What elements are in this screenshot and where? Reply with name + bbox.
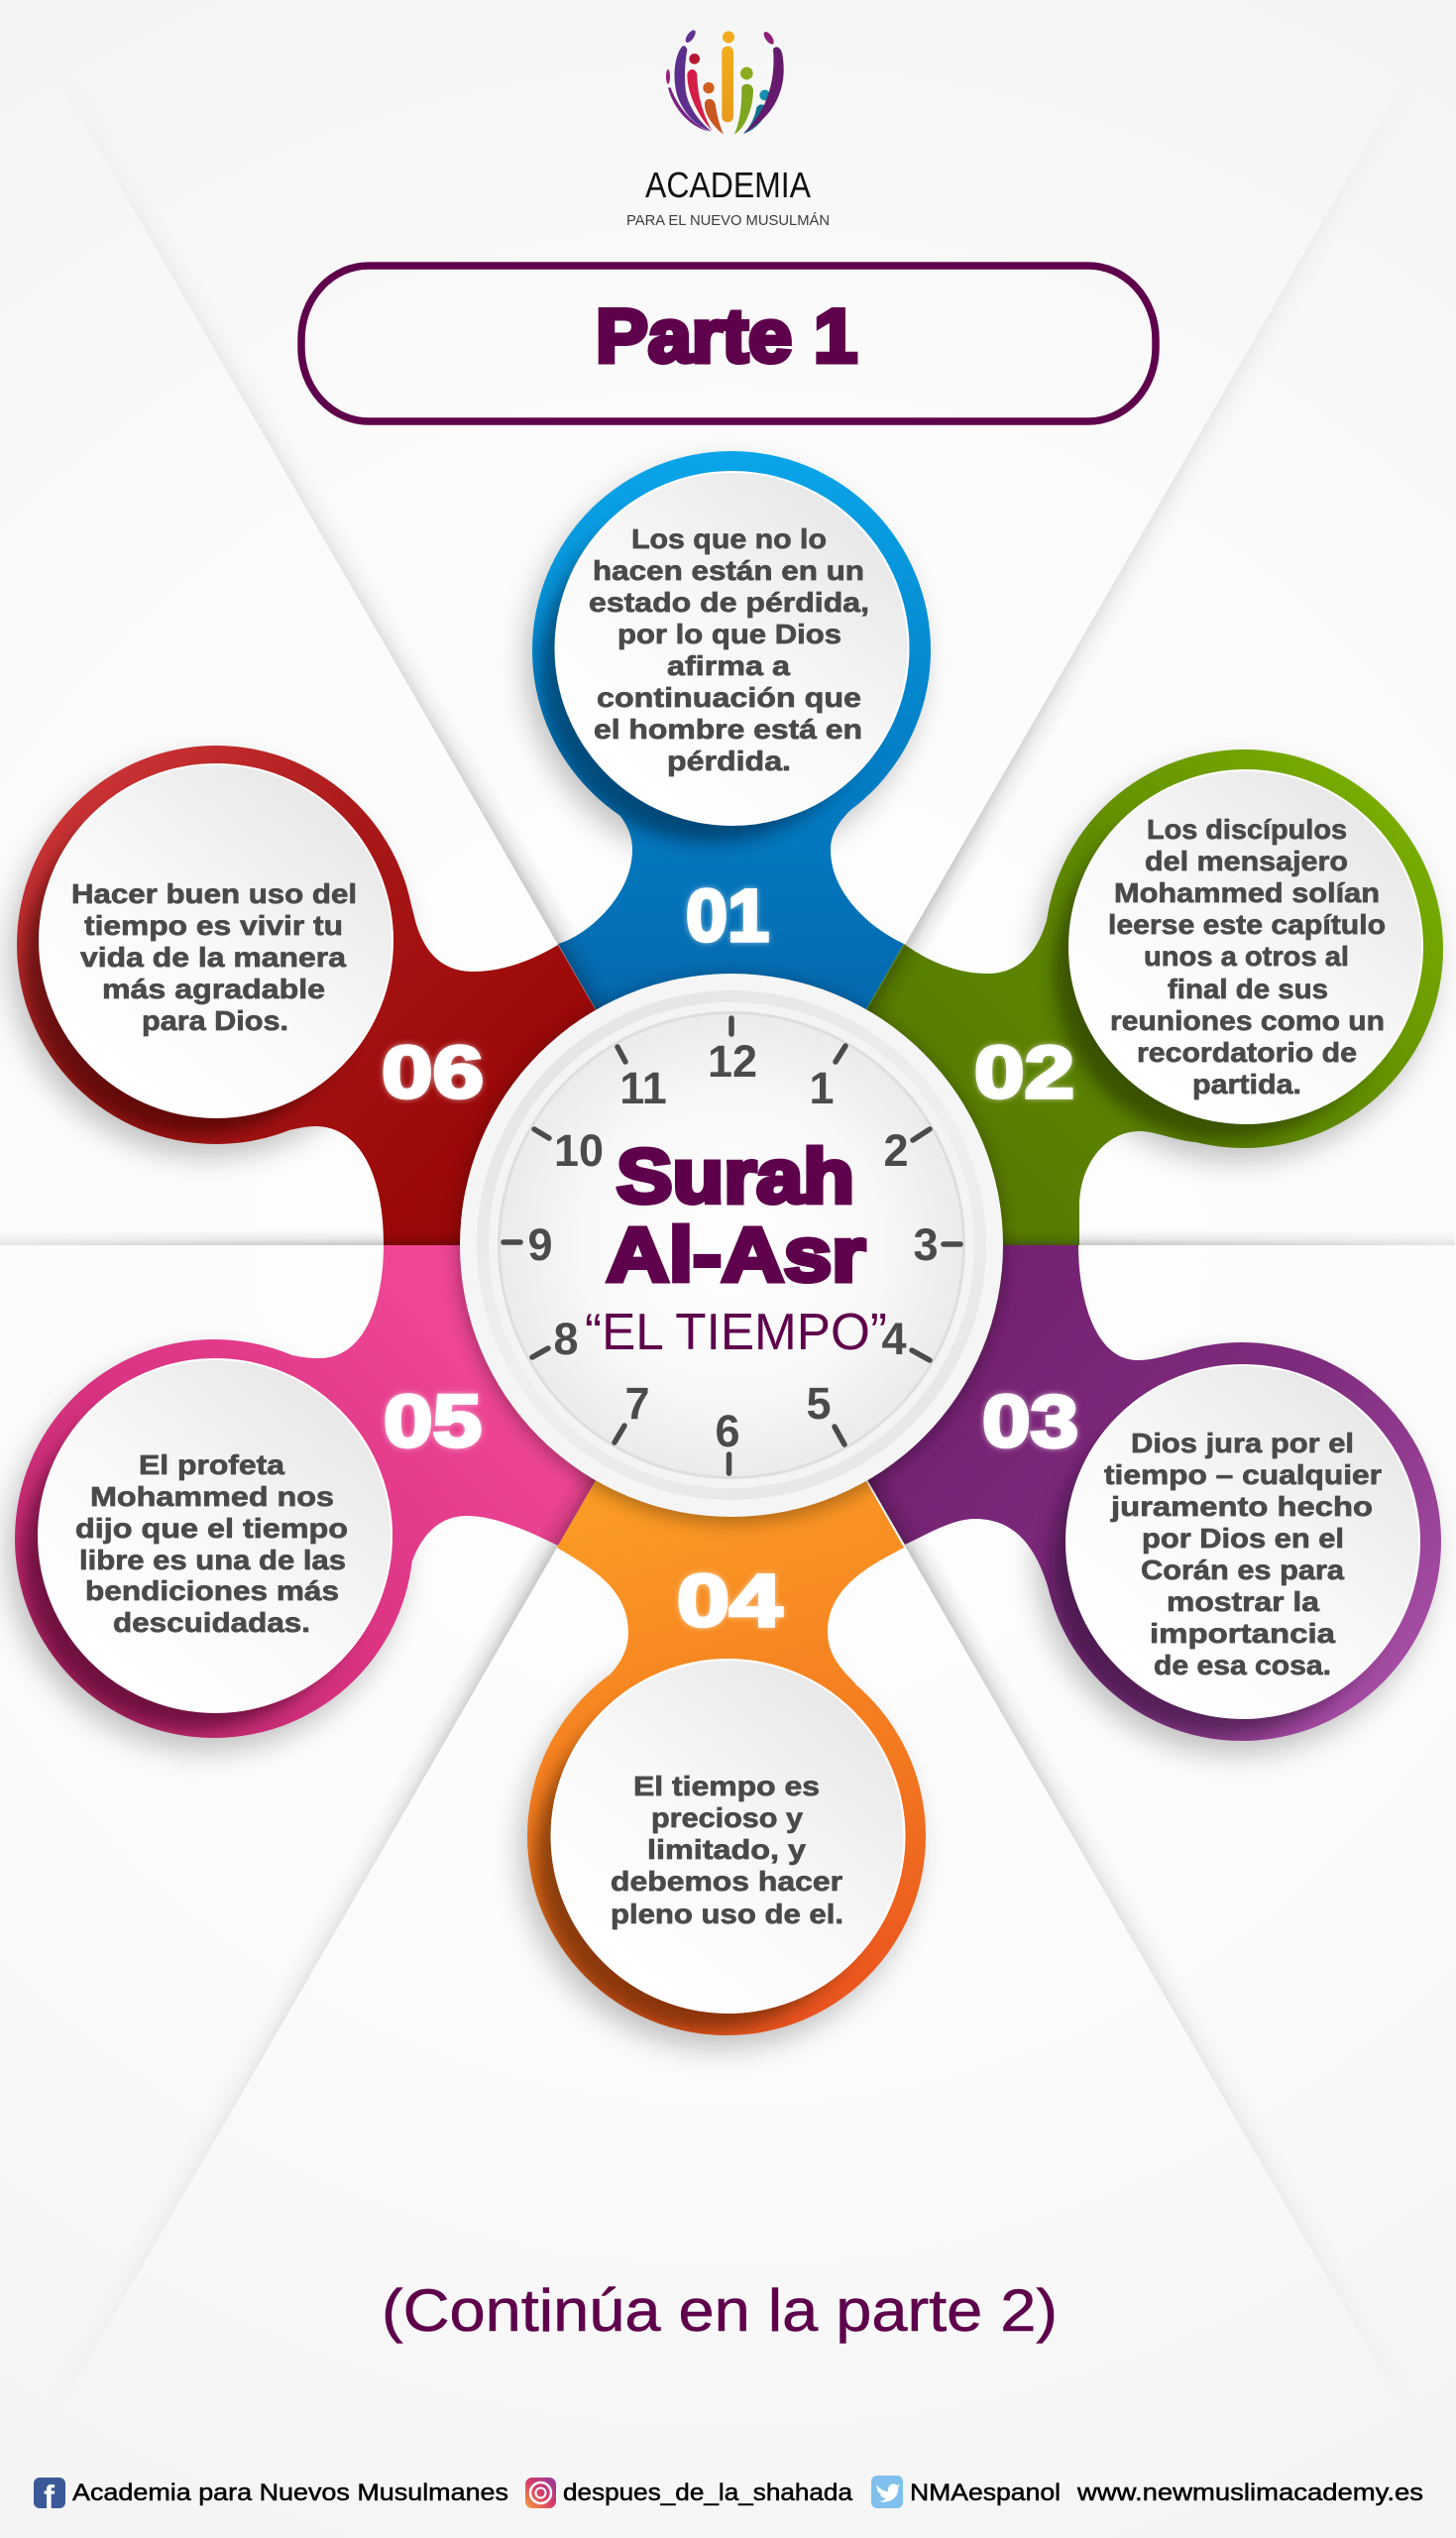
panel 02: green <box>866 750 1448 1245</box>
clock numerals: 7 <box>624 1378 650 1429</box>
text 02: Los discípulos <box>1147 814 1347 845</box>
number 01: 01 <box>686 874 769 957</box>
text 03: Corán es para <box>1141 1555 1344 1585</box>
clock title: Al-Asr: Al-Asr <box>607 1212 865 1298</box>
clock numerals: 6 <box>715 1406 740 1456</box>
text 04: El tiempo es <box>633 1771 820 1801</box>
logo: Academia para el nuevo musulmán <box>626 29 830 229</box>
text 02: reuniones como un <box>1110 1005 1385 1036</box>
icon: facebook: f <box>44 2479 56 2515</box>
text 05: descuidadas. <box>113 1607 310 1638</box>
text 06: Hacer buen uso del <box>71 878 357 909</box>
text 03: por Dios en el <box>1142 1523 1344 1554</box>
logo wordmark: ACADEMIA <box>645 165 811 205</box>
text 04 <box>611 1771 843 1929</box>
clock numerals: 3 <box>913 1219 939 1270</box>
panel 01: blue <box>511 451 936 1010</box>
clock numerals <box>527 1036 939 1456</box>
title text: Parte 1 <box>596 294 857 379</box>
clock numerals: 9 <box>527 1219 553 1270</box>
text 05: El profeta <box>139 1449 284 1480</box>
icon: facebook <box>34 2478 65 2515</box>
text 06: vida de la manera <box>80 942 346 973</box>
clock numerals: 4 <box>881 1314 907 1364</box>
text 01: estado de pérdida, <box>589 587 869 618</box>
text 01 <box>589 523 869 776</box>
text 06 <box>71 878 357 1036</box>
number 06: 06 <box>382 1031 484 1113</box>
text 03: juramento hecho <box>1110 1491 1373 1522</box>
panel 04: orange <box>506 1480 931 2062</box>
number 04: 04 <box>677 1559 782 1642</box>
clock tick marks <box>504 1018 960 1473</box>
clock numerals: 2 <box>883 1125 909 1176</box>
twitter label: NMAespanol <box>910 2480 1061 2506</box>
text 01: por lo que Dios <box>617 619 841 649</box>
logo tagline: PARA EL NUEVO MUSULMÁN <box>626 212 830 229</box>
instagram label: despues_de_la_shahada <box>563 2480 853 2506</box>
website: www.newmuslimacademy.es <box>1076 2480 1423 2506</box>
text 03: de esa cosa. <box>1154 1650 1331 1680</box>
clock numerals: 1 <box>809 1063 835 1113</box>
text 02: Mohammed solían <box>1114 877 1380 908</box>
text 01: hacen están en un <box>593 555 864 586</box>
text 05: bendiciones más <box>85 1575 339 1606</box>
clock numerals: 8 <box>553 1314 579 1364</box>
text 02: leerse este capítulo <box>1108 909 1386 940</box>
text 01: afirma a <box>667 650 790 681</box>
text 01: pérdida. <box>667 746 791 776</box>
number 02: 02 <box>974 1031 1074 1113</box>
text 04: debemos hacer <box>611 1866 842 1897</box>
logo mark: figures in a globe <box>666 29 784 135</box>
clock numerals: 5 <box>806 1378 832 1429</box>
text 04: precioso y <box>651 1802 803 1833</box>
text 06: para Dios. <box>142 1005 288 1036</box>
icon: instagram <box>525 2478 556 2508</box>
text 03: Dios jura por el <box>1131 1428 1354 1458</box>
number 05: 05 <box>384 1380 482 1462</box>
title box: Parte 1 <box>301 266 1156 421</box>
clock title: Surah: Surah <box>616 1134 854 1219</box>
text 05: dijo que el tiempo <box>75 1513 348 1544</box>
facebook label: Academia para Nuevos Musulmanes <box>72 2480 508 2506</box>
text 06: tiempo es vivir tu <box>84 910 343 941</box>
text 02: partida. <box>1192 1069 1301 1099</box>
text 01: Los que no lo <box>631 523 827 554</box>
text 03: importancia <box>1150 1618 1336 1649</box>
number 03: 03 <box>982 1380 1078 1462</box>
text 01: continuación que <box>597 682 861 713</box>
text 05: libre es una de las <box>79 1545 346 1575</box>
text 04: pleno uso de el. <box>611 1899 843 1929</box>
text 02: del mensajero <box>1145 846 1348 876</box>
panel 03: purple <box>868 1245 1446 1768</box>
text 03: tiempo – cualquier <box>1104 1459 1382 1490</box>
text 02 <box>1108 814 1386 1099</box>
clock numerals: 12 <box>708 1036 757 1087</box>
clock subtitle: “EL TIEMPO” <box>585 1304 887 1361</box>
clock numerals: 10 <box>554 1125 604 1176</box>
clock numerals: 11 <box>619 1063 667 1113</box>
footer: social links <box>34 2476 1423 2515</box>
text 05: Mohammed nos <box>90 1481 334 1512</box>
text 02: recordatorio de <box>1137 1037 1357 1068</box>
text 02: final de sus <box>1168 974 1328 1004</box>
text 03: mostrar la <box>1167 1586 1319 1617</box>
clock <box>458 974 1005 1523</box>
icon: twitter <box>871 2476 903 2508</box>
text 06: más agradable <box>102 974 325 1004</box>
continuation note: (Continúa en la parte 2) <box>382 2277 1058 2344</box>
panel 05: pink <box>0 1245 596 1765</box>
text 03 <box>1104 1428 1382 1680</box>
text 01: el hombre está en <box>594 714 862 745</box>
text 05 <box>75 1449 348 1638</box>
panel 06: red <box>0 746 596 1245</box>
text 04: limitado, y <box>647 1834 806 1865</box>
text 02: unos a otros al <box>1144 941 1349 972</box>
